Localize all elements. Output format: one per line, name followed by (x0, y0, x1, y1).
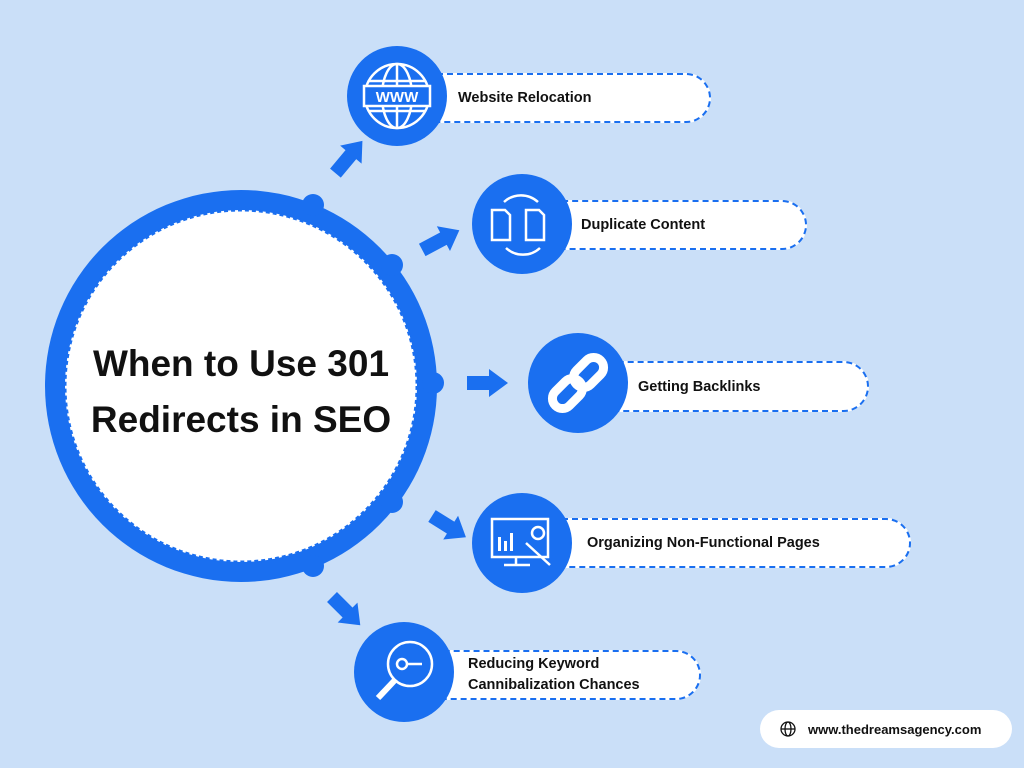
icon: duplicate content (472, 174, 572, 274)
pill: reducing keyword cannibalization: Reducing Keyword (468, 656, 599, 672)
arrows (322, 132, 508, 635)
pill: getting backlinks (578, 361, 869, 412)
pill: reducing keyword cannibalization (404, 650, 701, 700)
icon: www globe: WWW (376, 89, 419, 106)
footer: website url (760, 710, 1012, 748)
title: Redirects in SEO (91, 399, 391, 440)
icon: www globe (347, 46, 447, 146)
main circle (45, 190, 444, 582)
footer: website url: www.thedreamsagency.com (808, 722, 981, 736)
pill: reducing keyword cannibalization: Cannibalization Chances (468, 677, 640, 693)
pill: duplicate content (522, 200, 807, 250)
icon: monitor with wrench (472, 493, 572, 593)
pill: duplicate content: Duplicate Content (581, 217, 705, 233)
pill: getting backlinks: Getting Backlinks (638, 378, 760, 394)
pill: organizing non-functional pages (522, 518, 911, 568)
icon: magnifier with key (354, 622, 454, 722)
icon: link (528, 333, 628, 433)
pill: website relocation: Website Relocation (458, 90, 591, 106)
title (91, 343, 391, 440)
title: When to Use 301 (93, 343, 389, 384)
pill: organizing non-functional pages: Organizing Non-Functional Pages (587, 535, 820, 551)
pill: website relocation (397, 73, 711, 123)
